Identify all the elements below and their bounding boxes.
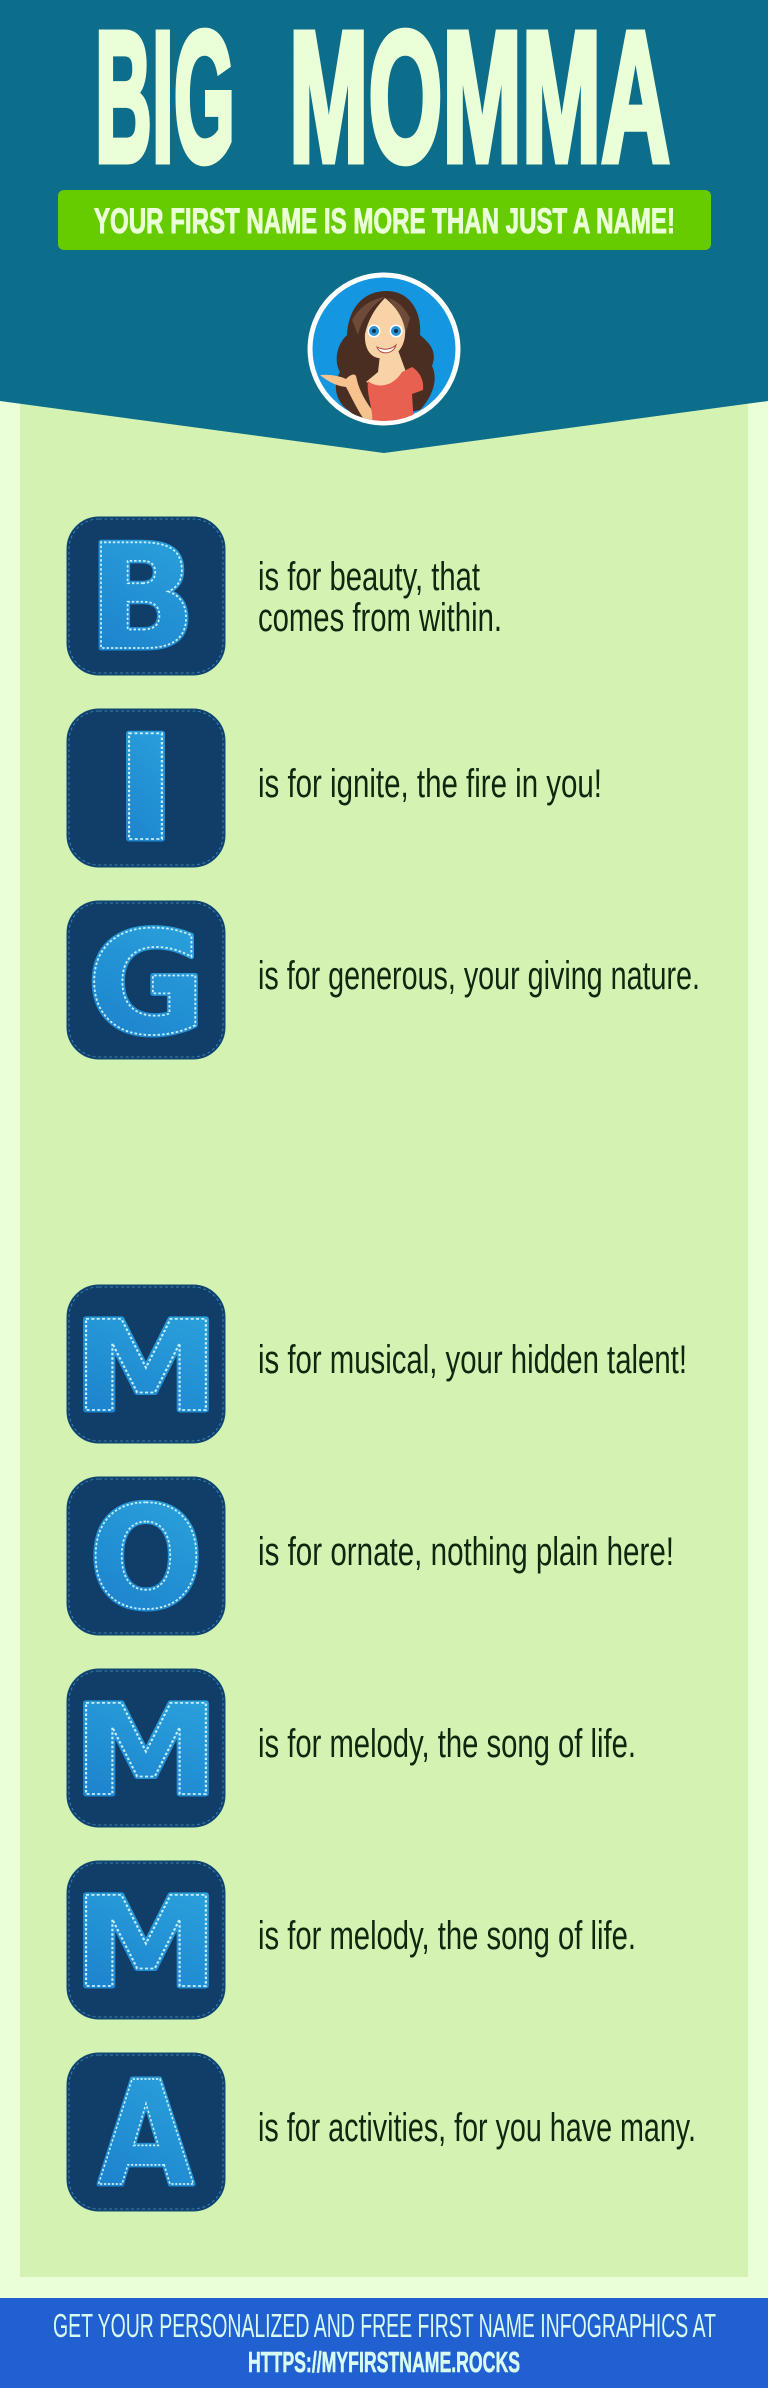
footer: HTTPS://MYFIRSTNAME.ROCKS — [248, 2347, 520, 2379]
text: I row: is for ignite, the fire in you! — [258, 762, 602, 806]
icon: letter G: G — [87, 902, 206, 1067]
icon: letter M: M — [72, 1679, 220, 1824]
icon: letter B — [67, 514, 225, 683]
icon: letter M: M — [72, 1871, 220, 2016]
text: B row — [258, 555, 502, 640]
title: BIG — [95, 0, 235, 201]
footer — [0, 2298, 768, 2388]
icon: letter A: A — [98, 2050, 194, 2218]
icon: letter I: I — [113, 705, 178, 874]
text: B row: is for beauty, that — [258, 555, 480, 599]
icon: letter B: B — [88, 514, 196, 683]
icon: avatar woman — [310, 275, 458, 425]
icon: letter M: M — [72, 1295, 220, 1440]
text: B row: comes from within. — [258, 596, 502, 640]
icon: letter I: I — [113, 705, 178, 874]
title — [95, 0, 670, 201]
icon: letter M: M — [72, 1679, 220, 1824]
text: M row: is for melody, the song of life. — [258, 1722, 636, 1766]
icon: letter I — [67, 705, 225, 874]
icon: letter A: A — [98, 2050, 194, 2218]
subtitle bar — [58, 190, 711, 250]
icon: letter G: G — [87, 902, 206, 1067]
icon: letter O: O — [89, 1477, 203, 1641]
icon: letter M: M — [72, 1295, 220, 1440]
text: M row: is for melody, the song of life. — [258, 1914, 636, 1958]
panel: content — [20, 380, 748, 2277]
header banner — [0, 0, 768, 453]
icon: letter M: M — [72, 1871, 220, 2016]
icon: letter O: O — [89, 1477, 203, 1641]
icon: letter B: B — [88, 514, 196, 683]
